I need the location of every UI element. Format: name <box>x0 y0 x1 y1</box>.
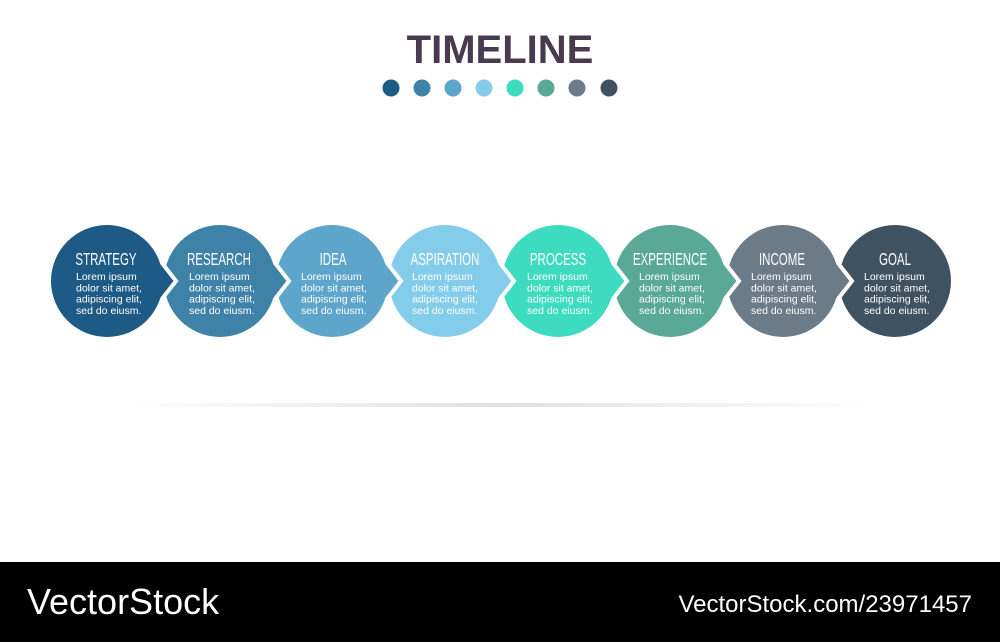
step 6: experience: dolor sit amet, <box>639 282 705 294</box>
step 8: goal: dolor sit amet, <box>864 282 930 294</box>
step 8: goal: sed do eiusm. <box>864 305 929 317</box>
step 5: process: sed do eiusm. <box>527 305 592 317</box>
step 4: aspiration: Lorem ipsum <box>412 271 473 283</box>
step 7: income: INCOME <box>759 250 805 270</box>
step 7: income <box>727 225 852 337</box>
step 1: strategy: STRATEGY <box>75 250 137 270</box>
step 5: process: dolor sit amet, <box>527 282 593 294</box>
step 4: aspiration: ASPIRATION <box>411 250 479 270</box>
step 7: income: adipiscing elit, <box>751 294 817 306</box>
step 1: strategy <box>51 225 176 337</box>
step 1: strategy: Lorem ipsum <box>76 271 137 283</box>
step 5: process <box>502 225 627 337</box>
step 4: aspiration: dolor sit amet, <box>412 282 478 294</box>
step 6: experience: adipiscing elit, <box>639 294 705 306</box>
step 5: process: adipiscing elit, <box>527 294 593 306</box>
step 6: experience <box>614 225 739 337</box>
footer bar <box>0 562 1000 642</box>
step 7: income: sed do eiusm. <box>751 305 816 317</box>
step 7: income: dolor sit amet, <box>751 282 817 294</box>
step 3: idea: sed do eiusm. <box>301 305 366 317</box>
footer logo: VectorStock <box>27 581 220 622</box>
step 2: research: Lorem ipsum <box>189 271 250 283</box>
step 5: process: Lorem ipsum <box>527 271 588 283</box>
step 8: goal <box>839 225 951 337</box>
footer url: VectorStock.com/23971457 <box>678 591 972 618</box>
step 2: research: sed do eiusm. <box>189 305 254 317</box>
step 3: idea: IDEA <box>320 250 347 270</box>
step 8: goal: GOAL <box>879 250 911 270</box>
step 8: goal: adipiscing elit, <box>864 294 930 306</box>
step 4: aspiration: adipiscing elit, <box>412 294 478 306</box>
step 2: research <box>164 225 289 337</box>
step 3: idea <box>276 225 401 337</box>
step 2: research: adipiscing elit, <box>189 294 255 306</box>
step 6: experience: EXPERIENCE <box>633 250 707 270</box>
step 7: income: Lorem ipsum <box>751 271 812 283</box>
step 3: idea: adipiscing elit, <box>301 294 367 306</box>
step 1: strategy: dolor sit amet, <box>76 282 142 294</box>
step 6: experience: sed do eiusm. <box>639 305 704 317</box>
title: TIMELINE <box>407 28 593 72</box>
step 3: idea: dolor sit amet, <box>301 282 367 294</box>
step 2: research: dolor sit amet, <box>189 282 255 294</box>
step 4: aspiration <box>389 225 514 337</box>
step 3: idea: Lorem ipsum <box>301 271 362 283</box>
color dots legend <box>382 80 618 96</box>
step 5: process: PROCESS <box>530 250 586 270</box>
step 1: strategy: adipiscing elit, <box>76 294 142 306</box>
step 4: aspiration: sed do eiusm. <box>412 305 477 317</box>
step 2: research: RESEARCH <box>187 250 251 270</box>
step 8: goal: Lorem ipsum <box>864 271 925 283</box>
step 1: strategy: sed do eiusm. <box>76 305 141 317</box>
step 6: experience: Lorem ipsum <box>639 271 700 283</box>
